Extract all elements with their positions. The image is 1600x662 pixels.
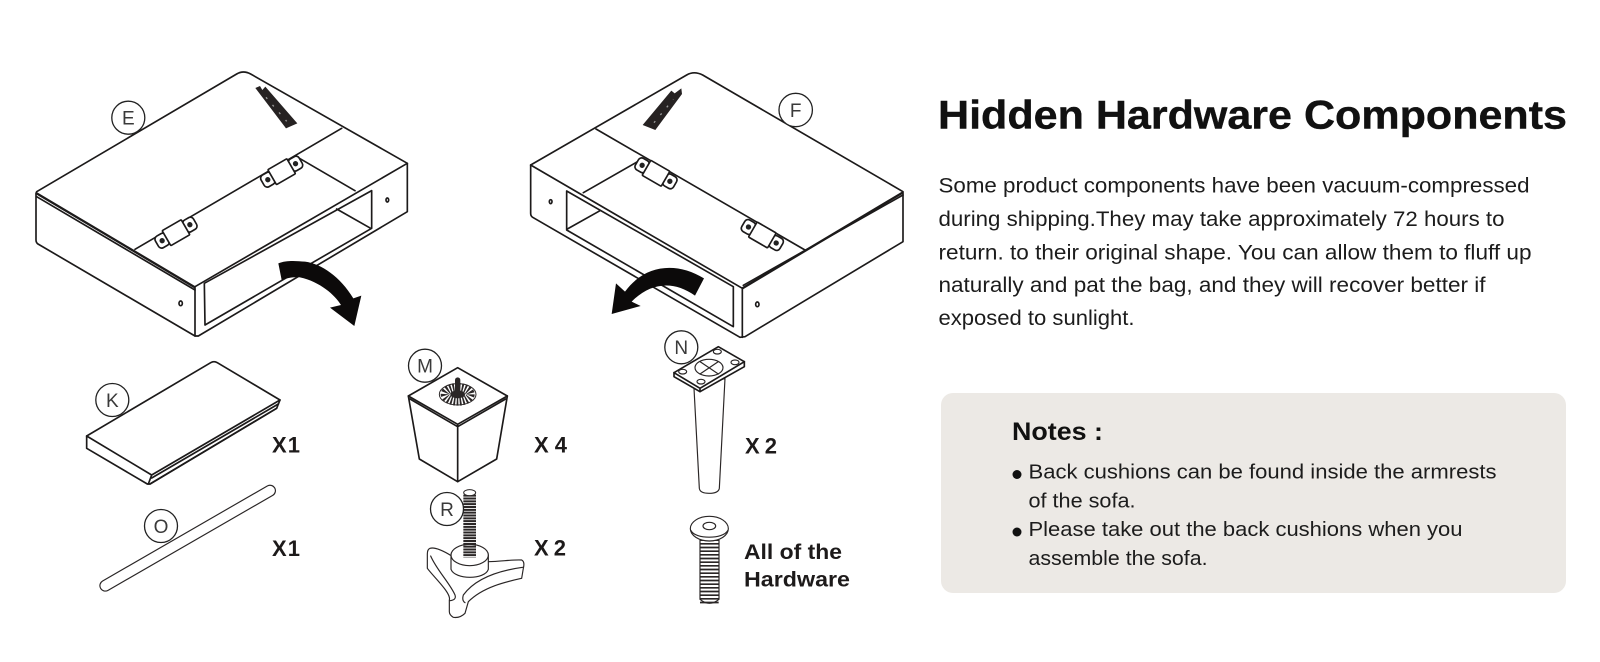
- body text: return. to their original shape. You can allow them to fluff up: [938, 241, 1532, 264]
- illustration: screw: [690, 516, 728, 603]
- quantity: N: X 2: [745, 433, 777, 458]
- arrow: [278, 261, 361, 326]
- icon: rail: [643, 88, 682, 130]
- label: K: K: [106, 391, 119, 412]
- label: R: [430, 492, 464, 526]
- body text: during shipping.They may take approximately 72 hours to: [938, 208, 1504, 231]
- label: E: E: [122, 108, 135, 130]
- note 2: assemble the sofa.: [1028, 547, 1208, 570]
- illustration: armrest box E: [36, 72, 407, 336]
- quantity: O: X 1: [272, 536, 300, 561]
- label: E: [112, 101, 145, 134]
- label: F: F: [790, 101, 802, 122]
- label: M: [408, 349, 442, 382]
- icon: rail: [255, 86, 297, 128]
- body text: naturally and pat the bag, and they will recover better if: [938, 274, 1486, 297]
- label: K: [96, 384, 129, 416]
- quantity: M: X 4: [534, 432, 568, 458]
- body text: exposed to sunlight.: [938, 307, 1134, 330]
- arrow: [612, 268, 704, 314]
- icon: bracket: [153, 214, 199, 251]
- illustration: tapered leg N: [674, 347, 744, 493]
- note 2: [1012, 518, 1462, 570]
- illustration: armrest box F: [531, 73, 903, 337]
- illustration: board K: [87, 362, 280, 484]
- notes heading: Notes :: [1012, 418, 1103, 446]
- note 2: Please take out the back cushions when you: [1028, 518, 1462, 541]
- icon: bracket: [633, 155, 679, 192]
- panel: notes: [941, 393, 1566, 593]
- icon: bracket: [258, 153, 305, 190]
- quantity: hardware: [744, 541, 850, 592]
- quantity: hardware: Hardware: [744, 569, 850, 592]
- illustration: rod O: [105, 491, 270, 586]
- label: M: M: [417, 356, 433, 378]
- label: O: [144, 510, 178, 542]
- illustration: knob bolt R: [427, 490, 524, 617]
- note 1: [1012, 460, 1496, 512]
- label: R: R: [440, 500, 454, 521]
- note 1: of the sofa.: [1028, 489, 1136, 512]
- label: N: [665, 331, 698, 364]
- quantity: R: X 2: [534, 536, 566, 561]
- title: Hidden Hardware Components: [938, 94, 1567, 138]
- label: F: [779, 93, 812, 127]
- body text: [938, 175, 1532, 330]
- quantity: hardware: All of the: [744, 541, 842, 564]
- illustration: square foot M: [408, 368, 507, 482]
- quantity: K: X 1: [272, 433, 300, 458]
- label: O: O: [154, 517, 168, 538]
- note 1: Back cushions can be found inside the armrests: [1028, 460, 1496, 483]
- label: N: N: [674, 338, 688, 359]
- body text: Some product components have been vacuum-compressed: [938, 175, 1530, 198]
- icon: bracket: [739, 216, 786, 254]
